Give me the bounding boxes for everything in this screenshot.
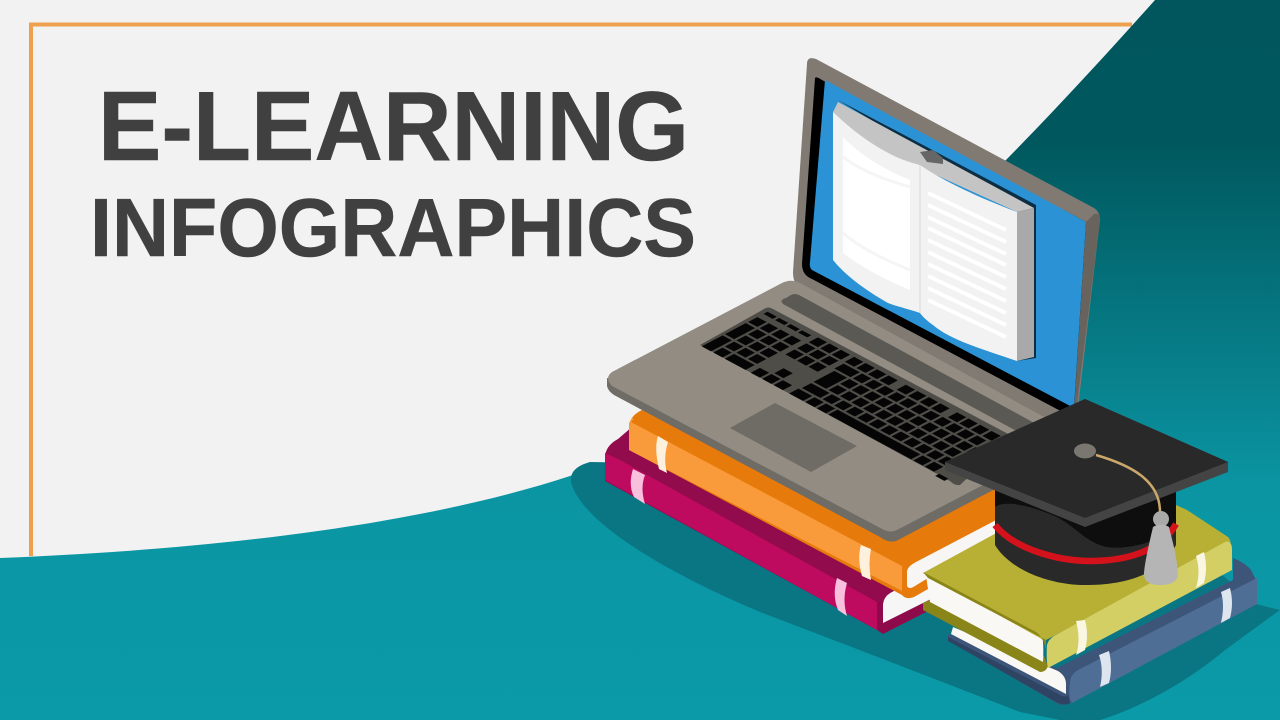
touchpad	[730, 403, 857, 472]
book: orange	[629, 380, 1000, 598]
keyboard deck	[700, 308, 1012, 485]
ebook on screen	[833, 100, 1036, 361]
ground shadow	[571, 462, 1280, 720]
book: blue	[948, 558, 1257, 705]
graduation cap	[945, 399, 1228, 585]
cap body	[995, 470, 1176, 585]
mortarboard	[945, 399, 1228, 527]
book: magenta	[605, 420, 935, 634]
title line 1: E-LEARNING	[98, 71, 689, 181]
title	[90, 71, 696, 274]
tassel	[1144, 511, 1178, 585]
book stack: illustration	[605, 380, 1257, 705]
laptop	[607, 58, 1100, 541]
cap button	[1074, 444, 1096, 458]
book: olive	[923, 505, 1232, 672]
laptop base top	[608, 281, 1075, 532]
laptop lid	[793, 58, 1100, 430]
title line 2: INFOGRAPHICS	[90, 181, 696, 274]
tassel cord	[1096, 455, 1160, 512]
orange frame	[31, 24, 1132, 556]
keyboard	[698, 308, 1012, 485]
red band	[995, 524, 1176, 561]
speaker bar	[782, 294, 1062, 446]
keys	[698, 313, 1012, 481]
laptop base front edge	[607, 378, 1060, 542]
